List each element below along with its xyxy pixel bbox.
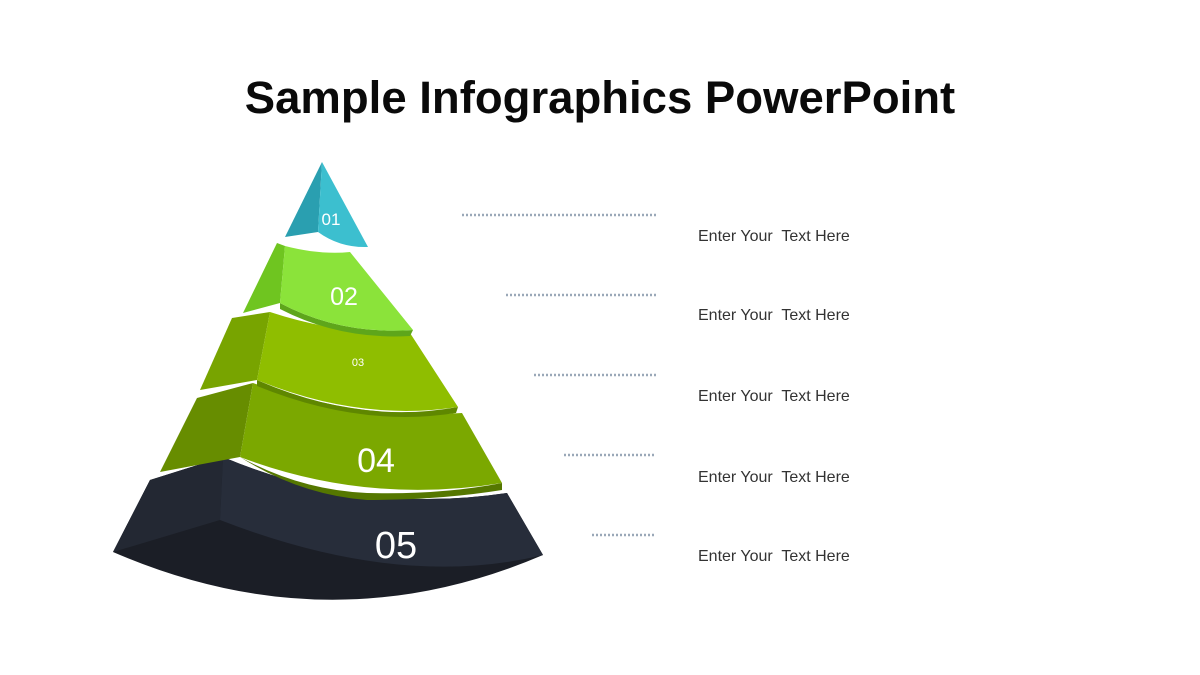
connector lines [462,215,656,535]
tier 2 [243,243,413,336]
tier 2: 02 [330,283,358,311]
text labels [698,228,850,565]
tier 1: 01 [322,210,340,229]
label 2: Enter Your Text Here [698,307,850,324]
tier 3 [200,312,458,417]
title: Sample Infographics PowerPoint [245,72,955,123]
tier 4: 04 [357,442,395,480]
tier 1 [285,162,368,247]
tier 4 [160,383,502,500]
label 5: Enter Your Text Here [698,548,850,565]
label 3: Enter Your Text Here [698,388,850,405]
tier 3: 03 [352,357,364,369]
tier 5: 05 [375,525,417,567]
label 1: Enter Your Text Here [698,228,850,245]
tier 5 [113,457,543,600]
label 4: Enter Your Text Here [698,469,850,486]
